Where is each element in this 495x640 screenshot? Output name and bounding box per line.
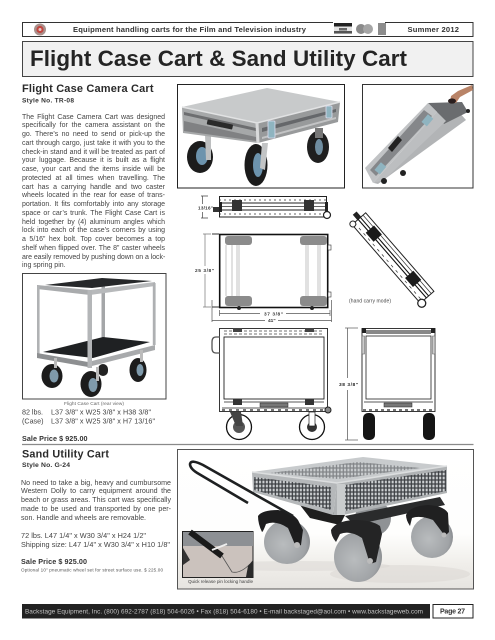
caption: rear view: Flight Case Cart (rear view) [64,401,124,407]
heading: sand utility cart: Sand Utility Cart [22,448,109,460]
text block: flight case cart description: The Flight Case Camera Cart was designed [22,114,165,120]
specifications: sand utility cart: 72 lbs. L47 1/4" x W30 3/4" x H24 1/2" [21,531,146,540]
diagram: front elevation [212,328,331,440]
icon: company logo [34,24,46,36]
photo: flight case cart closed [178,84,344,188]
text block: sand utility cart description [21,478,171,522]
optional wheel note: Optional 10" pneumatic wheel set for street surface use. $ 225.00 [21,568,163,572]
photo: sand utility cart [178,450,474,589]
text block: flight case cart description: held together by (4) aluminum angles which [22,218,165,226]
diagram: top view [213,196,330,218]
specifications: flight case cart: 82 lbs. [22,408,43,416]
specifications: flight case cart: L37 3/8" x W25 3/8" x H38 3/8" [51,408,151,416]
footer contact text: Backstage Equipment, Inc. (800) 692-2787 (818) 504-6026 • Fax (818) 504-6180 • E-mail backstaged@aol.com • www.backstageweb.com [25,608,423,616]
specifications: flight case cart [22,408,155,426]
dimension: 13/16 inch [198,196,213,218]
caption: inset photo: Quick release pin locking handle [188,579,253,584]
diagram: plan view [212,234,331,310]
dimension: 37 3/8 inch: 37 3/8" [264,312,283,318]
sale price: sand utility cart: Sale Price $ 925.00 [21,557,87,566]
photo: flight case cart rear view [22,274,166,399]
diagram: hand carry mode [345,208,437,309]
dimension: 25 3/8 inch [195,234,214,307]
photo: flight case in hand carry mode [362,84,473,188]
footer bar [22,604,430,618]
text block: flight case cart description: go. There’s no need to send or pick-up the [22,131,165,138]
title banner [22,42,473,76]
text block: sand utility cart description: No need to take a big, heavy and cumbursome [21,478,171,486]
icon: credit cards [333,22,386,36]
dimension: 37 3/8 inch [220,310,330,318]
page number box: Page 27 [440,608,465,616]
header date: Summer 2012 [408,25,459,34]
text block: flight case cart description: cart through cargo, just take it with you to the [22,140,165,147]
page number box [433,604,473,618]
text block: flight case cart description: portation. It fits comfortably into any storage [22,201,165,208]
heading: flight case camera cart: Flight Case Camera Cart [22,83,154,95]
sale price: flight case cart: Sale Price $ 925.00 [22,434,88,443]
caption: hand carry mode: (hand carry mode) [349,298,391,304]
text block: flight case cart description: space or car’s trunk. The Flight Case Cart is [22,210,165,217]
text block: flight case cart description: lock into each of the case’s corners by using [22,227,165,234]
text block: flight case cart description: protected at all times when travelling. The [22,175,165,182]
diagram: side elevation [362,328,435,440]
dimension: 41 inch: 41" [268,318,276,324]
text block: flight case cart description: a 5/16” hex bolt. Top cover becomes a top [22,236,165,243]
style number TR-08: Style No. TR-08 [22,98,74,104]
text block: flight case cart description: check-in stand and it will be treated as part of [22,148,165,156]
text block: flight case cart description [22,114,166,269]
text block: flight case cart description: wheels located in the rear for ease of trans- [22,192,165,199]
text block: sand utility cart description: made to be used and transported by one per- [21,505,171,513]
header tagline: Equipment handling carts for the Film and Television industry [73,25,307,34]
dimension: 25 3/8 inch: 25 3/8" [195,268,214,274]
inset photo: quick release pin [182,532,253,578]
dimension: 13/16 inch: 13/16" [198,206,213,210]
specifications: sand utility cart [21,531,170,549]
text block: flight case cart description: are easily removed by pushing down on a lock- [22,254,165,260]
text block: flight case cart description: your luggage. Because it is built as a flight [22,157,165,164]
text block: flight case cart description: specifically for the camera assistant on the [22,122,165,129]
specifications: flight case cart: (Case) [22,416,44,426]
text block: sand utility cart description: Western Dolly to carry equipment around the [21,487,171,495]
text block: sand utility cart description: beach or grass areas. This cart was specifically [21,496,171,504]
specifications: sand utility cart: Shipping size: L47 1/4" x W30 3/4" x H10 1/8" [21,540,170,549]
specifications: flight case cart: L37 3/8" x W25 3/8" x H7 13/16" [51,416,155,426]
title: Flight Case Cart & Sand Utility Cart [30,46,408,71]
text block: flight case cart description: shelf when flipped over. The 8” caster wheels [22,245,165,252]
text block: flight case cart description: case, your cart and the items inside will be [22,166,165,173]
header bar [22,22,473,36]
dimension: 38 3/8 inch: 38 3/8" [339,382,358,388]
dimension: 38 3/8 inch [339,328,358,440]
text block: flight case cart description: ing spring pin. [22,262,66,269]
text block: flight case cart description: cart has a carrying handle and two caster [22,184,165,190]
text block: sand utility cart description: son. Handle and wheels are removable. [21,514,146,522]
style number G-24: Style No. G-24 [22,462,70,469]
dimension: 41 inch [212,300,332,324]
